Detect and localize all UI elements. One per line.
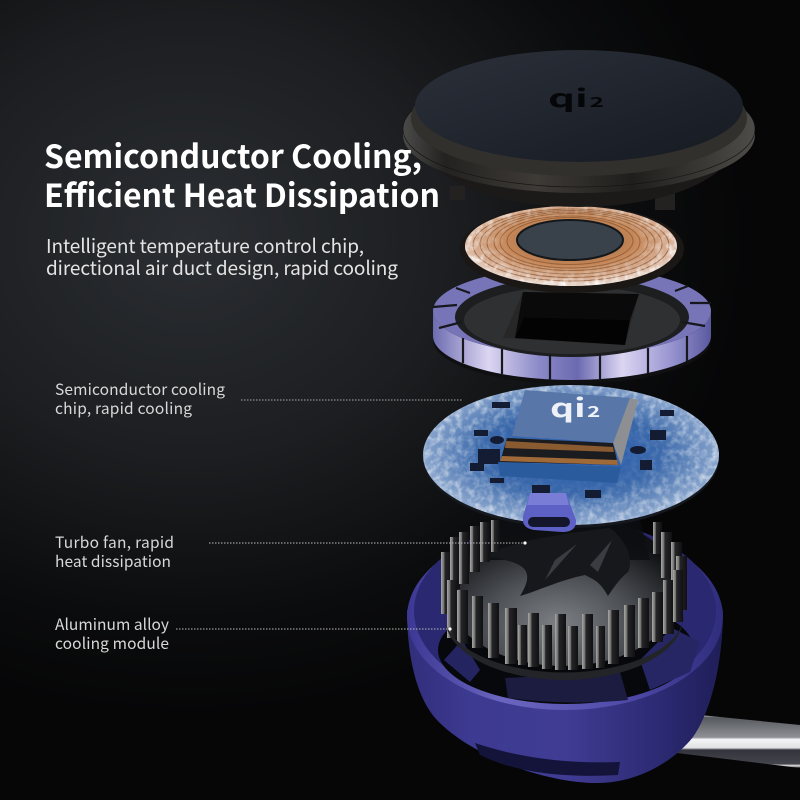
heat sink base ring [444, 614, 684, 680]
callout: semiconductor cooling chip [55, 378, 462, 419]
PCB board with frost [423, 385, 719, 532]
callout: aluminum alloy module: Aluminum alloy [55, 613, 169, 635]
circuit components [470, 402, 674, 498]
square cavity [503, 292, 639, 345]
callout: turbo fan: heat dissipation [55, 550, 171, 572]
turbo fan and heat sink interior [445, 514, 681, 666]
USB-C connector [523, 493, 576, 532]
wireless charging coil [460, 205, 684, 293]
heat sink fins [441, 520, 687, 670]
aluminium housing [407, 519, 723, 783]
qi2 logo on chip: qi2 [550, 389, 600, 425]
title: Semiconductor Cooling, [44, 132, 422, 178]
callout: turbo fan: Turbo fan, rapid [55, 531, 174, 553]
qi2 chip [498, 389, 638, 483]
magnet ring [433, 267, 711, 384]
callout: aluminum alloy module [55, 613, 452, 654]
callout: turbo fan [55, 531, 527, 572]
subtitle: Intelligent temperature control chip, [46, 232, 364, 259]
handle bar [677, 715, 800, 768]
title: Efficient Heat Dissipation [44, 171, 440, 217]
qi2 logo on cap: qi2 [548, 79, 604, 114]
charging cap [403, 50, 755, 210]
magnet segment gaps [433, 286, 711, 380]
callout: semiconductor cooling chip: Semiconductor cooling [55, 378, 225, 400]
subtitle: directional air duct design, rapid cooling [46, 254, 398, 281]
callout: semiconductor cooling chip: chip, rapid cooling [55, 397, 192, 419]
callout: aluminum alloy module: cooling module [55, 632, 169, 654]
